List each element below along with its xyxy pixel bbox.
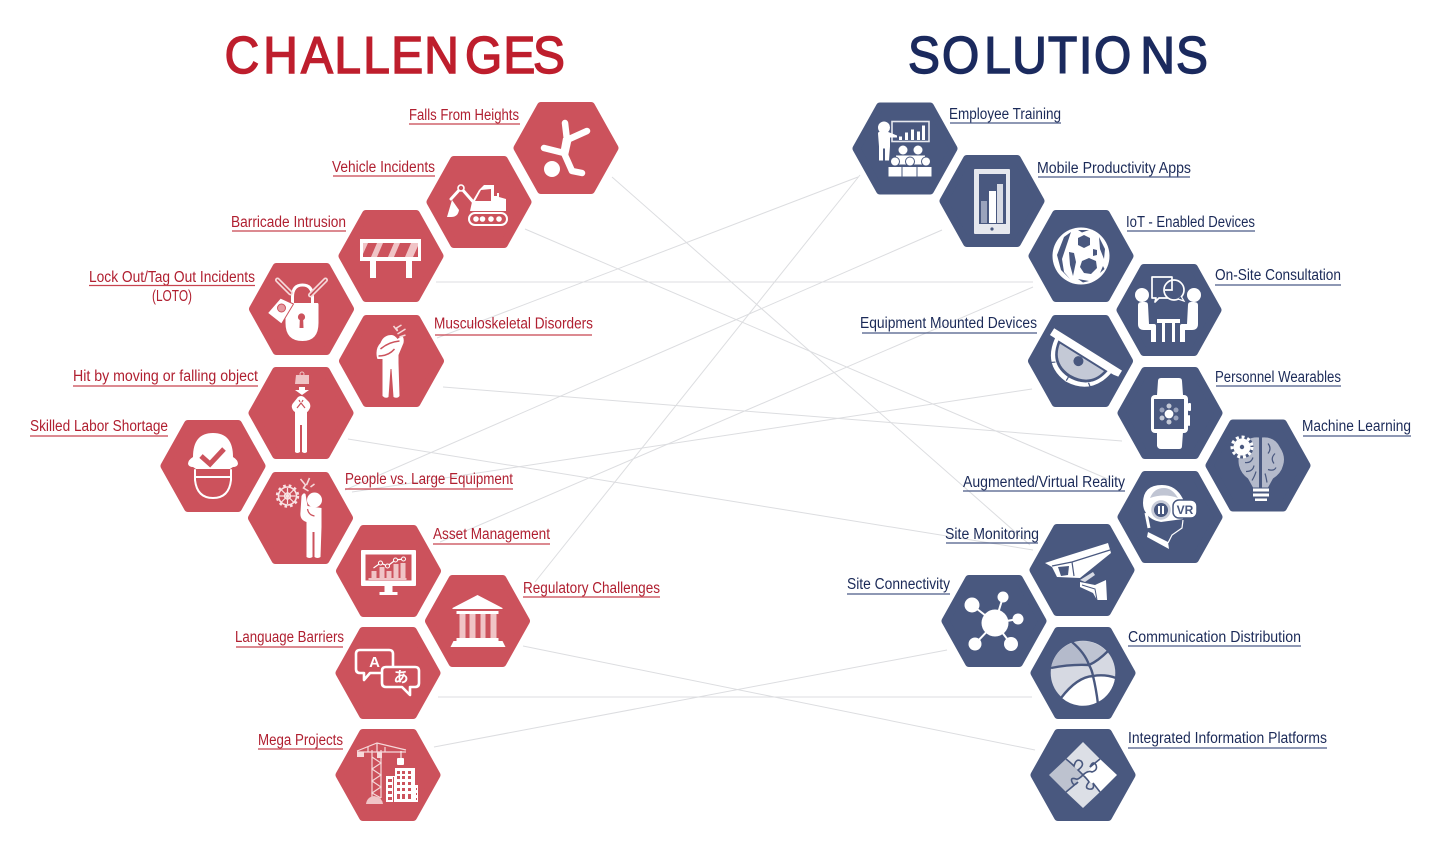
hexagon [340,733,436,817]
item: asset management [340,526,551,613]
label: Site Connectivity: Site Connectivity [847,576,950,593]
item: on-site consultation [1120,267,1341,352]
label: Mobile Productivity Apps: Mobile Productivity Apps [1037,160,1191,177]
item: site connectivity [847,576,1042,663]
item: vehicle incidents [332,159,528,244]
item: mega projects [258,732,436,817]
label: Hit by moving or falling object: Hit by moving or falling object [73,368,259,385]
hexagon [1122,371,1218,455]
label: On-Site Consultation: On-Site Consultation [1215,267,1341,284]
hexagon [856,106,954,190]
hexagon [1122,475,1218,559]
hexagon [1034,528,1130,612]
hexagon [253,267,350,351]
icon: hard hat with check [188,433,238,498]
hexagon [946,579,1042,663]
label: Equipment Mounted Devices: Equipment Mounted Devices [860,315,1037,332]
label: Augmented/Virtual Reality: Augmented/Virtual Reality [963,474,1125,491]
label: Mega Projects: Mega Projects [258,732,343,749]
hexagon [343,319,440,403]
hexagon [1034,733,1132,817]
item: musculoskeletal disorders [343,316,593,403]
item: lock out tag out incidents [89,267,350,351]
title: challenges: CHALLENGES [225,26,565,84]
item: regulatory challenges [429,579,660,663]
hexagon [1034,631,1132,715]
connector lines between challenges and solutions [345,175,1122,750]
item: language barriers [235,629,436,715]
item: integrated information platforms [1034,730,1327,817]
icon: tablet with bar chart [974,169,1010,234]
item: barricade intrusion [231,214,440,298]
hexagon [1032,214,1130,298]
hexagon [429,579,526,663]
hexagon [944,159,1040,243]
item: employee training [856,106,1061,190]
label: Barricade Intrusion: Barricade Intrusion [231,214,346,231]
icon: falling person [544,123,587,177]
icon: person and gear [277,478,322,558]
hexagon [340,631,436,715]
icon: protractor gauge [1034,328,1122,404]
label: Vehicle Incidents: Vehicle Incidents [332,159,435,176]
icon: puzzle pieces [1049,742,1117,808]
hexagon [252,371,350,455]
item: personnel wearables [1122,369,1341,455]
icon: excavator [447,185,507,225]
label: Personnel Wearables: Personnel Wearables [1215,369,1341,386]
icon: brain lightbulb with gear [1230,436,1284,501]
hexagon [1120,268,1218,352]
hexagon [518,106,614,190]
label: Falls From Heights: Falls From Heights [409,107,519,124]
hexagon [342,214,440,298]
item: equipment mounted devices [860,315,1129,404]
icon: translation speech bubbles: A [369,654,380,671]
icon: network hub [964,592,1024,651]
panel: challenges [30,106,660,817]
label: People vs. Large Equipment: People vs. Large Equipment [345,471,514,488]
icon: padlock with tag [268,280,326,341]
icon: person with neck pain [376,325,406,398]
item: hit by moving or falling object [73,368,350,455]
hexagon [164,424,262,508]
icon: two people consulting at table [1135,277,1201,342]
label: Lock Out/Tag Out Incidents (LOTO) [89,269,255,305]
label: Regulatory Challenges: Regulatory Challenges [523,580,660,597]
label: Language Barriers: Language Barriers [235,629,344,646]
icon: translation speech bubbles: あ [393,669,409,686]
item: skilled labor shortage [30,418,262,508]
icon: person under falling weight [292,372,310,453]
panel: solutions [847,106,1411,817]
hexagon [430,160,528,244]
item: machine learning [1210,418,1411,508]
hexagon [340,529,437,613]
icon: head with VR headset [1143,485,1197,549]
item: communication distribution [1034,629,1301,715]
item: falls from heights [409,106,614,190]
icon: security camera [1045,543,1111,600]
item: iot enabled devices [1032,214,1255,298]
icon: crane and buildings [357,743,418,804]
label: Lock Out/Tag Out Incidents (LOTO): (LOTO) [152,288,192,305]
label: Employee Training: Employee Training [949,106,1061,123]
label: Machine Learning: Machine Learning [1302,418,1411,435]
icon: smartwatch [1151,378,1191,449]
icon: networked globe [1052,228,1110,284]
item: site monitoring [945,526,1130,612]
icon: head with VR headset: VR [1177,503,1194,517]
label: IoT - Enabled Devices: IoT - Enabled Devices [1126,214,1255,231]
hexagon [1210,424,1306,508]
icon: government building [450,595,506,647]
item: augmented virtual reality [963,474,1218,559]
label: Lock Out/Tag Out Incidents (LOTO): Lock Out/Tag Out Incidents [89,269,255,286]
icon: translation speech bubbles [356,650,419,695]
icon: monitor with chart [361,550,416,595]
item: mobile productivity apps [944,159,1191,243]
icon: segmented ball [1051,641,1116,706]
icon: presenter with audience [878,122,932,177]
label: Skilled Labor Shortage: Skilled Labor Shortage [30,418,168,435]
icon: barricade [360,239,421,278]
title: solutions: SOLUTIONS [908,26,1208,84]
item: people vs large equipment [252,471,514,560]
label: Musculoskeletal Disorders: Musculoskeletal Disorders [434,316,593,332]
label: Site Monitoring: Site Monitoring [945,526,1039,543]
hexagon [1032,319,1129,403]
label: Asset Management: Asset Management [433,526,551,543]
hexagon [252,476,349,560]
label: Communication Distribution: Communication Distribution [1128,629,1301,646]
label: Integrated Information Platforms: Integrated Information Platforms [1128,730,1327,747]
